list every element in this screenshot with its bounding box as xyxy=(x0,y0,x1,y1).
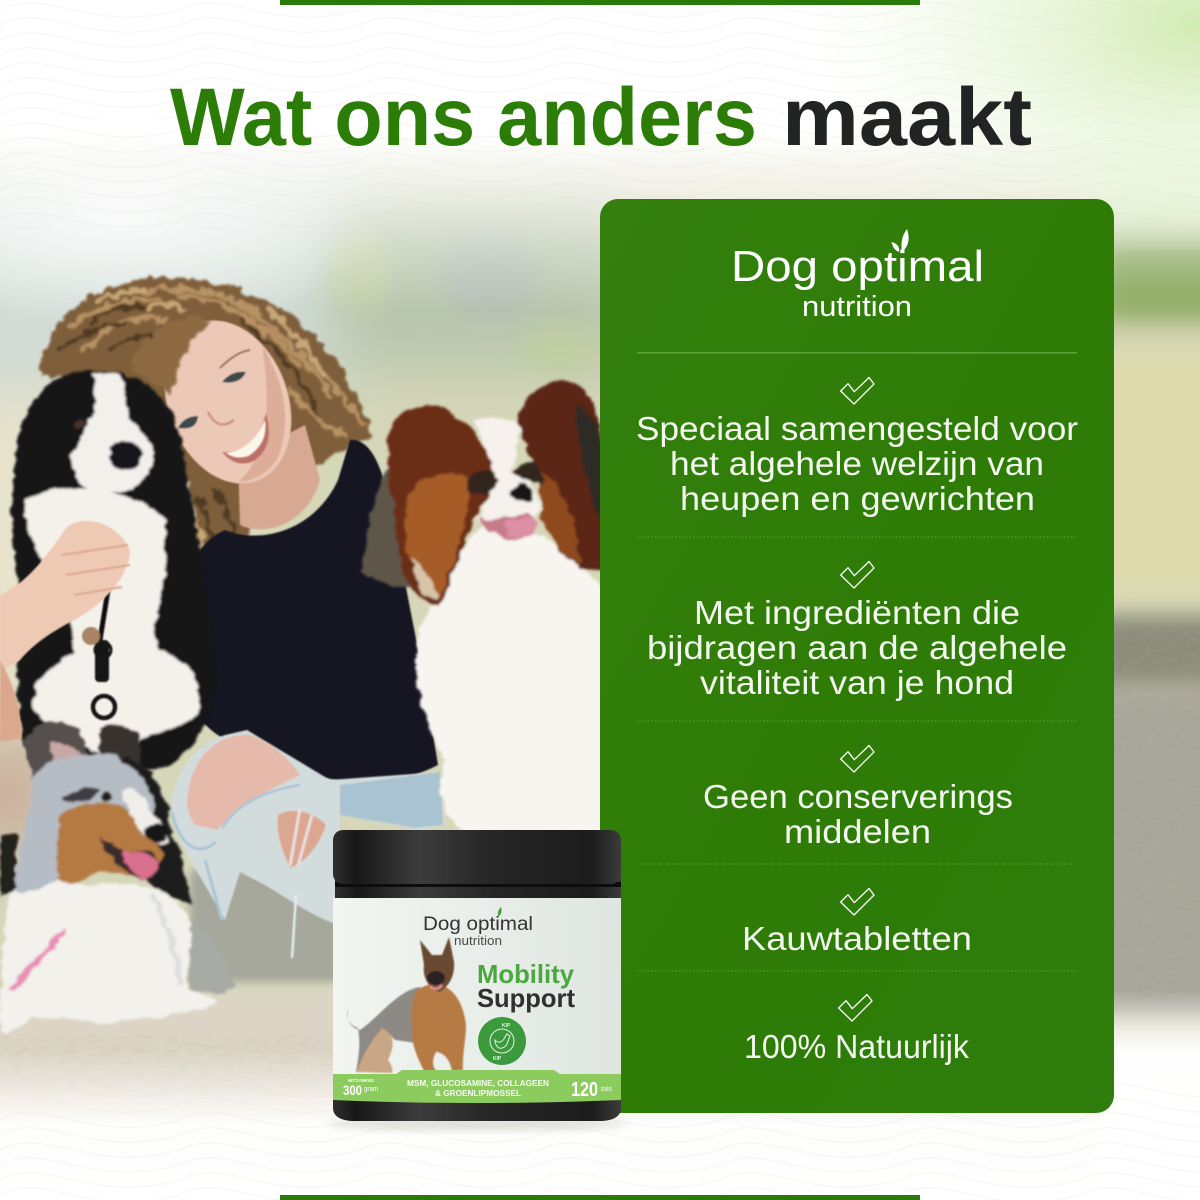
benefit 2 xyxy=(647,562,1067,701)
sheltie muzzle xyxy=(122,786,168,844)
ingredients text: MSM, GLUCOSAMINE, COLLAGEEN xyxy=(407,1079,549,1088)
sheltie tail xyxy=(190,920,235,994)
bottom white fade xyxy=(0,1050,1200,1200)
collie leash xyxy=(82,590,115,718)
net weight: NETTO INHOUD xyxy=(348,1078,375,1083)
sheltie tan cheek xyxy=(57,803,165,882)
woman: arm and hand xyxy=(0,521,130,742)
product jar: Mobility Support: Support xyxy=(477,983,575,1013)
right side ground fade xyxy=(1100,990,1200,1200)
german shepherd illustration xyxy=(347,937,466,1073)
wave pattern bottom xyxy=(0,1080,1200,1200)
benefit 3: middelen xyxy=(784,813,931,850)
brand logo: nutrition xyxy=(802,291,912,323)
benefit 2: Met ingrediënten die xyxy=(694,594,1020,631)
benefit 1: het algehele welzijn van xyxy=(670,445,1044,482)
kip badge xyxy=(478,1017,526,1065)
benefit 1: Speciaal samengesteld voor xyxy=(636,410,1078,447)
label brand: Dog optimal xyxy=(423,914,533,935)
woman: jeans and knee xyxy=(170,730,445,958)
top green bar xyxy=(280,0,920,5)
woman: neck xyxy=(238,425,320,529)
papillon left ear xyxy=(388,406,498,605)
wave pattern top xyxy=(0,0,1200,230)
photo: woman with dogs xyxy=(0,277,604,1031)
sheltie dark back xyxy=(0,833,17,895)
woman: face xyxy=(143,303,313,501)
top white fade xyxy=(0,0,1200,310)
count: stuks xyxy=(601,1086,612,1093)
product jar: Mobility Support: nutrition xyxy=(454,934,502,948)
benefit 5: 100% Natuurlijk xyxy=(744,1028,969,1065)
sheltie pink leash xyxy=(8,928,66,992)
benefit 2: bijdragen aan de algehele xyxy=(647,629,1067,666)
net weight xyxy=(343,1078,378,1098)
product jar: Mobility Support xyxy=(327,830,627,1131)
background foliage blotches xyxy=(330,225,600,375)
benefit 1: heupen en gewrichten xyxy=(680,480,1035,517)
sheltie dog xyxy=(0,722,235,1031)
product name: Mobility xyxy=(477,959,575,989)
papillon right ear xyxy=(517,380,604,570)
label green strip xyxy=(333,1070,621,1103)
shadow behind jeans xyxy=(190,870,340,982)
papillon head xyxy=(472,418,540,534)
ingredients text: & GROENLIPMOSSEL xyxy=(435,1089,521,1098)
label leaf xyxy=(498,907,502,917)
woman: black shirt xyxy=(177,440,438,782)
bottom green bar xyxy=(280,1195,920,1200)
sheltie black ruff xyxy=(125,755,190,905)
jar label xyxy=(333,898,621,1074)
benefit 3: Geen conserverings xyxy=(703,778,1013,815)
jar lid xyxy=(333,830,621,884)
jar body band xyxy=(335,878,621,908)
ingredients text xyxy=(407,1079,549,1098)
kip badge: KIP xyxy=(502,1023,511,1029)
woman: forehead hair xyxy=(130,318,212,395)
benefit 4 xyxy=(742,888,972,957)
title: maakt xyxy=(782,72,1032,163)
brand logo xyxy=(731,229,984,323)
sheltie merle head xyxy=(15,754,155,894)
jar base xyxy=(333,1095,621,1121)
ground left under dogs xyxy=(0,990,350,1110)
header divider xyxy=(637,352,1077,354)
right side foliage and grass xyxy=(1095,130,1200,595)
papillon left fringe xyxy=(362,440,425,590)
sheltie body xyxy=(0,877,217,1031)
jar shadow xyxy=(327,1117,627,1131)
benefit 4: Kauwtabletten xyxy=(742,920,972,957)
count: 120 xyxy=(571,1079,598,1101)
ground right of panel xyxy=(1090,615,1200,1020)
top right green tint xyxy=(800,0,1200,250)
panel background xyxy=(600,199,1114,1113)
panel: green benefits card xyxy=(600,199,1114,1113)
benefit 5 xyxy=(744,994,969,1065)
woman: hair xyxy=(40,277,372,600)
benefit 1 xyxy=(636,378,1078,517)
benefit 2: vitaliteit van je hond xyxy=(700,664,1014,701)
kip badge: KIP xyxy=(493,1056,502,1062)
title: Wat ons anders xyxy=(170,72,757,163)
border collie xyxy=(11,370,215,771)
sheltie ears xyxy=(22,722,87,785)
left pale glow xyxy=(0,110,380,330)
benefit 3 xyxy=(703,746,1013,850)
net weight: gram xyxy=(364,1086,378,1093)
papillon chest xyxy=(416,527,604,835)
net weight: 300 xyxy=(343,1082,362,1098)
papillon dog xyxy=(362,380,604,835)
brand logo: Dog optimal xyxy=(731,242,984,291)
